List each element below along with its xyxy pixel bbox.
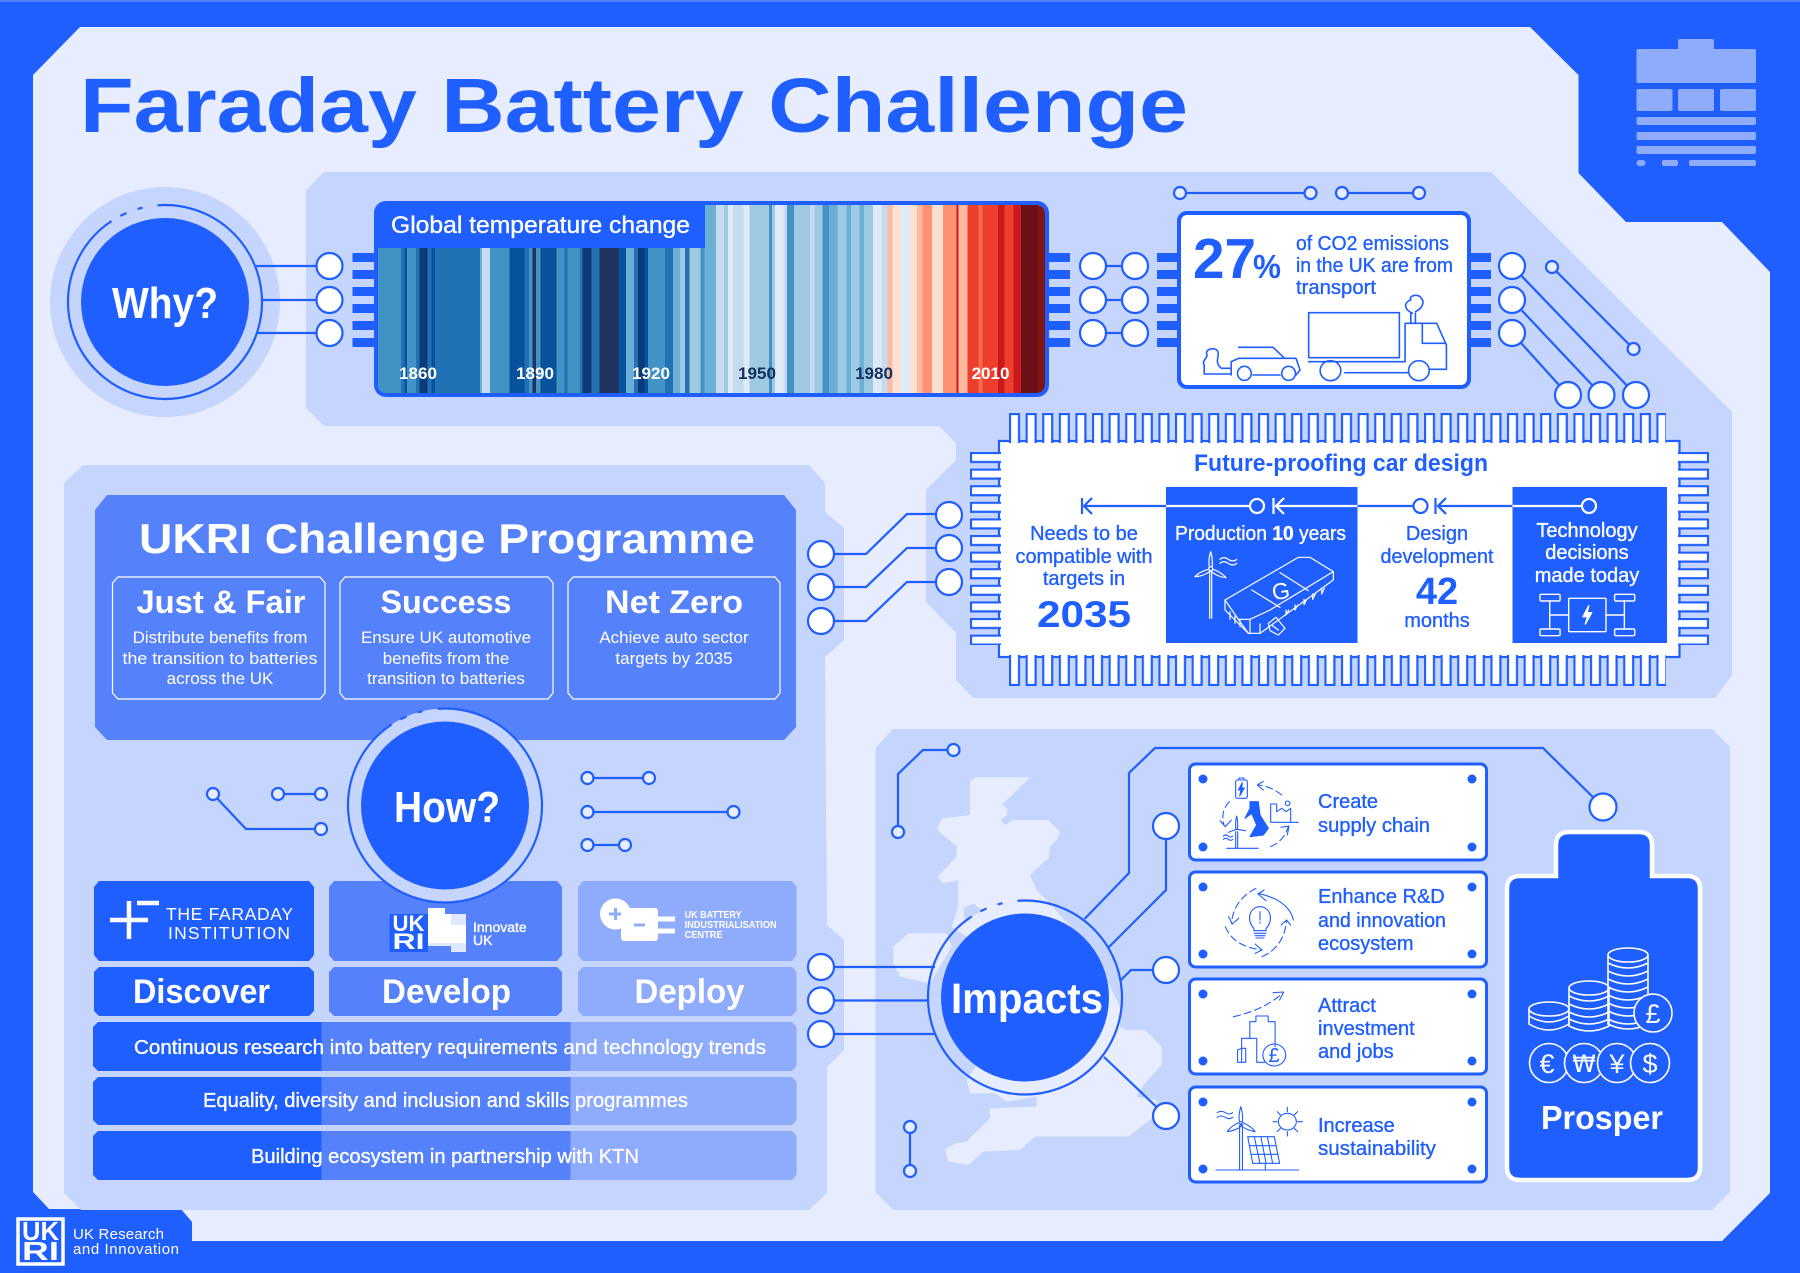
connectors: stripes to CO2 box [1048,253,1178,347]
icon: turbine and battery pack [1194,551,1334,636]
pound icon glyph: £ [1268,1045,1280,1067]
label: develop: Develop [382,973,511,1011]
stripes frame [376,203,1047,395]
column: discover logo: INSTITUTION [168,923,290,943]
panel: 27% CO2 emissions [1179,213,1469,387]
CO2 text: transport [1296,277,1376,299]
card: net zero: targets by 2035 [615,649,733,668]
panel: future-proofing chip [970,413,1709,686]
icon: turbine sun and solar panel [1215,1106,1303,1170]
title: Faraday Battery Challenge [80,63,1188,149]
text: design development: Design [1406,523,1468,545]
investment text [1318,995,1415,1063]
panel: why and future-proofing background [306,172,1732,698]
panel: prosper battery [1507,832,1700,1180]
supply chain text [1318,791,1430,837]
text: production 10 years: Production 10 years [1175,523,1346,545]
text: technology decisions: decisions [1545,542,1629,564]
stat: 27%: 27 [1193,227,1256,291]
text: needs to be compatible: targets in [1043,568,1125,590]
investment text: and jobs [1318,1041,1394,1063]
row: continuous research: Continuous research into battery requirements and technology trends [134,1037,766,1059]
icon: battery corner mark [1636,39,1756,166]
how label: How? [394,783,500,832]
card: enhance R&D [1190,872,1486,967]
card: success: benefits from the [383,649,509,668]
card: success [340,577,553,699]
column: develop logo: Innovate [473,919,527,935]
text: design development: months [1404,610,1470,632]
R&D text: Enhance R&D [1318,886,1445,908]
footer logo: UK Research and Innovation [18,1216,179,1266]
R&D text: and innovation [1318,910,1446,932]
column: develop logo [329,881,562,961]
timeline [1082,498,1596,514]
why label: Why? [112,279,218,328]
card: net zero: Achieve auto sector [599,628,749,647]
card: success: transition to batteries [367,669,525,688]
year labels: 2010 [972,364,1009,383]
footer logo: UK Research and Innovation: UK Research [73,1226,164,1243]
text: design development [1380,523,1494,632]
icon: growth and buildings [1232,992,1286,1066]
chart: global temperature warming stripes [376,203,1047,395]
impacts label: Impacts [951,975,1103,1023]
label: deploy: Deploy [634,973,745,1011]
programme heading: UKRI Challenge Programme [139,515,755,562]
currency symbols: £ [1645,999,1661,1029]
year labels [399,364,1009,383]
blue block: production [1166,487,1358,643]
sustainability text [1318,1115,1436,1160]
year labels: 1890 [516,364,554,383]
column: develop logo: UK [392,911,425,936]
footer logo: UK Research and Innovation: UK [22,1216,59,1246]
currency symbols: € [1539,1049,1555,1079]
supply chain text: Create [1318,791,1378,813]
investment text: Attract [1318,995,1376,1017]
column: discover logo [94,881,314,961]
stat percent sign: % [1253,248,1281,285]
column: deploy logo: CENTRE [685,929,723,941]
year labels: 1860 [399,364,437,383]
card: success: Ensure UK automotive [361,628,531,647]
card: attract investment [1190,979,1486,1074]
year labels: 1980 [855,364,893,383]
label: deploy [578,967,796,1016]
stripes header tab [376,203,705,248]
connectors: impacts to outcomes [892,744,1616,1177]
icon: lightbulb cycle [1224,888,1294,958]
prosper label: Prosper [1541,1099,1663,1136]
connectors: why to stripes [256,253,376,347]
CO2 text [1296,233,1453,299]
text: needs to be compatible: 2035 [1037,594,1131,635]
card: just and fair: Distribute benefits from [133,628,307,647]
sustainability text: Increase [1318,1115,1395,1137]
text: technology decisions [1535,520,1639,587]
how circle [341,702,549,909]
text: design development: development [1380,546,1494,568]
label: discover: Discover [133,973,270,1011]
supply chain text: supply chain [1318,815,1430,837]
card: net zero: Net Zero [605,584,743,620]
icon: truck and car [1202,294,1448,382]
column: deploy logo: UK BATTERY [685,909,742,921]
footer logo: UK Research and Innovation: RI [22,1236,59,1266]
R&D text [1318,886,1446,955]
blue block: technology [1512,487,1667,643]
label: discover [94,967,314,1016]
card: just and fair: Just & Fair [136,584,306,620]
panel: UKRI Challenge Programme [95,495,796,740]
card: success: Success [380,584,512,620]
card: just and fair: across the UK [167,669,274,688]
battery G mark: G [1270,577,1292,605]
currency symbols: $ [1642,1049,1658,1079]
text: technology decisions: made today [1535,565,1639,587]
year labels: 1920 [632,364,670,383]
text: needs to be compatible: compatible with [1016,546,1152,568]
why circle [50,187,280,417]
decorative circuit nodes around how [207,772,740,851]
icon: car chassis [1539,594,1636,636]
text: technology decisions: Technology [1536,520,1638,542]
icon: coin stacks [1529,948,1672,1082]
column: deploy logo: INDUSTRIALISATION [685,919,777,931]
column: develop logo: RI [392,929,424,954]
connectors: how panel to chip [808,502,962,634]
currency symbols: ¥ [1608,1049,1625,1079]
column: discover logo: THE FARADAY [166,904,293,924]
year labels: 1950 [738,364,776,383]
icon: supply chain [1219,778,1299,849]
footer logo: UK Research and Innovation: and Innovation [73,1241,179,1258]
R&D text: ecosystem [1318,933,1414,955]
card: just and fair [112,577,325,699]
row: equality diversity inclusion: Equality, diversity and inclusion and skills programmes [203,1090,688,1112]
map: United Kingdom silhouette [893,778,1162,1165]
row: continuous research [93,1022,796,1071]
row: building ecosystem: Building ecosystem in partnership with KTN [251,1146,639,1168]
CO2 text: of CO2 emissions [1296,233,1449,255]
decorative nodes above CO2 box [1174,187,1425,199]
card: increase sustainability [1190,1087,1486,1182]
currency symbols [1539,999,1661,1079]
label: develop [329,967,562,1016]
text: needs to be compatible: Needs to be [1030,523,1138,545]
card: net zero [568,577,780,699]
row: equality diversity inclusion [93,1077,796,1125]
panel: how background [64,465,844,1210]
row: building ecosystem [93,1131,796,1180]
stripes heading: Global temperature change [391,212,690,239]
sustainability text: sustainability [1318,1138,1436,1160]
CO2 text: in the UK are from [1296,255,1453,277]
impacts circle [921,894,1129,1101]
column: deploy logo [578,881,796,961]
text: design development: 42 [1416,571,1458,613]
column: develop logo: UK [473,932,493,948]
connectors: CO2 box to chip [1469,253,1649,408]
currency symbols: ₩ [1572,1050,1596,1078]
chip heading: Future-proofing car design [1194,450,1488,477]
panel: impacts background [876,729,1730,1210]
card: create supply chain [1190,764,1486,860]
connectors: how panel to impacts [808,954,935,1047]
card: just and fair: the transition to batteries [122,649,318,668]
investment text: investment [1318,1018,1415,1040]
text: needs to be compatible [1016,523,1152,635]
